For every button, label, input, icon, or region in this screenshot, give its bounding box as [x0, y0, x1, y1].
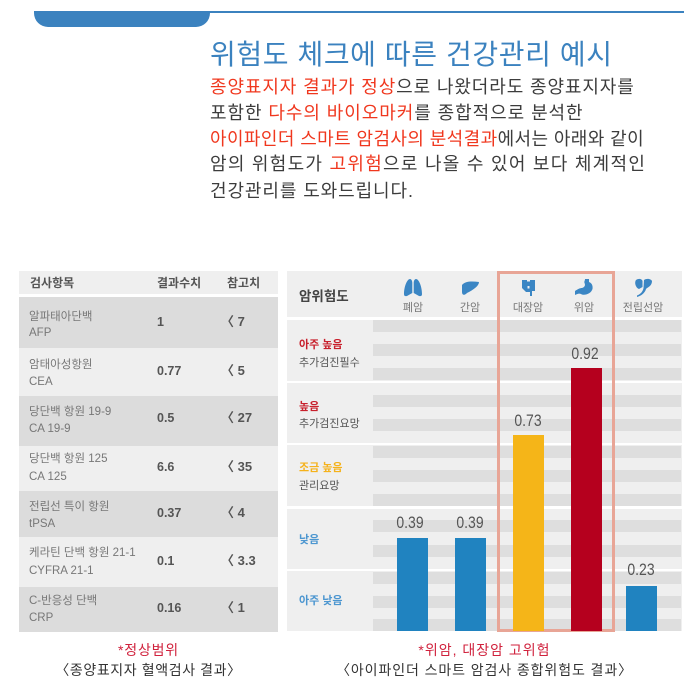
risk band: slightly high: 조금 높음 — [299, 462, 343, 474]
row: CYFRA 21-1 — [19, 537, 278, 587]
intro text block: 암의 위험도가 고위험으로 나올 수 있어 보다 체계적인 — [210, 154, 646, 174]
row: AFP: 알파태아단백 — [29, 311, 92, 323]
risk band: high — [287, 383, 682, 443]
row: CA 19-9: 당단백 항원 19-9 — [29, 406, 111, 418]
risk band: high: 높음 — [299, 401, 319, 413]
row: CRP: 0.16 — [157, 601, 181, 615]
icon: stomach: 위암 — [574, 302, 594, 314]
heading: cancer risk: 암위험도 — [299, 289, 349, 304]
row: CA 125: 당단백 항원 125 — [29, 453, 107, 465]
row: AFP: AFP — [29, 327, 51, 339]
risk band: low — [287, 509, 682, 569]
icon: liver: 간암 — [460, 302, 480, 314]
row: CA 19-9 — [19, 396, 278, 446]
table header: 결과수치 — [157, 276, 201, 290]
intro text block: 포함한 다수의 바이오마커를 종합적으로 분석한 — [210, 103, 584, 123]
row: tPSA: 0.37 — [157, 506, 181, 520]
intro text block: 건강관리를 도와드립니다. — [210, 181, 414, 201]
row: tPSA — [19, 491, 278, 537]
row: CEA: 〈 5 — [221, 363, 245, 378]
table header — [19, 271, 278, 294]
row: CRP — [19, 587, 278, 632]
row: CRP: C-반응성 단백 — [29, 595, 97, 607]
icon: prostate — [623, 278, 663, 314]
row: CYFRA 21-1: 0.1 — [157, 554, 174, 568]
risk band: very high — [287, 320, 682, 381]
intro text block: 종양표지자 결과가 정상으로 나왔더라도 종양표지자를 — [210, 77, 635, 97]
bar: colorectal cancer 0.73 — [513, 410, 544, 631]
icon: lungs: 폐암 — [403, 302, 423, 314]
row: CA 19-9: 〈 27 — [221, 410, 252, 425]
row: AFP — [19, 297, 278, 348]
caption: cancer risk chart: 〈아이파인더 스마트 암검사 종합위험도 결과〉 — [336, 662, 633, 678]
risk band: very high: 추가검진필수 — [299, 357, 360, 369]
bar: stomach cancer 0.92: 0.92 — [571, 343, 599, 363]
bar: colorectal cancer 0.73: 0.73 — [514, 410, 542, 430]
risk band: slightly high — [287, 445, 682, 506]
risk band: very low — [287, 571, 682, 631]
header tab and rule — [34, 11, 684, 27]
panel: cancer risk chart — [287, 271, 682, 632]
icon: lungs — [403, 279, 423, 314]
icon: colon: 대장암 — [513, 302, 543, 314]
row: tPSA: 전립선 특이 항원 — [29, 501, 109, 513]
icon: prostate: 전립선암 — [623, 302, 663, 314]
row: CYFRA 21-1: 〈 3.3 — [221, 553, 256, 568]
row: CA 125 — [19, 446, 278, 491]
title: 위험도 체크에 따른 건강관리 예시 — [210, 39, 613, 70]
risk band: very low: 아주 낮음 — [299, 595, 343, 607]
row: tPSA: tPSA — [29, 518, 55, 530]
row: CEA: 0.77 — [157, 364, 181, 378]
row: AFP: 〈 7 — [221, 314, 245, 329]
row: CYFRA 21-1: CYFRA 21-1 — [29, 565, 94, 577]
risk band: very high: 아주 높음 — [299, 339, 343, 351]
bar: liver cancer 0.39: 0.39 — [456, 512, 484, 532]
intro text block: 아이파인더 스마트 암검사의 분석결과에서는 아래와 같이 — [210, 129, 644, 149]
row: CRP: CRP — [29, 612, 53, 624]
bar: lung cancer 0.39: 0.39 — [396, 512, 424, 532]
icon: colon — [513, 280, 543, 314]
row: tPSA: 〈 4 — [221, 505, 245, 520]
caption: tumor marker table: 〈종양표지자 혈액검사 결과〉 — [55, 662, 242, 678]
table header: 검사항목 — [30, 276, 74, 290]
risk band: slightly high: 관리요망 — [299, 480, 339, 492]
risk band: low: 낮음 — [299, 534, 319, 546]
row: CEA: CEA — [29, 376, 53, 388]
panel: tumor marker table — [19, 271, 278, 632]
risk band: high: 추가검진요망 — [299, 418, 360, 430]
bar: liver cancer 0.39 — [455, 512, 486, 631]
icon: liver — [460, 282, 480, 314]
bar: lung cancer 0.39 — [396, 512, 428, 631]
caption: tumor marker table: *정상범위 — [118, 642, 179, 658]
row: CA 19-9: 0.5 — [157, 411, 174, 425]
background stripes — [373, 320, 681, 631]
row: CA 125: 〈 35 — [221, 459, 252, 474]
row: CEA: 암태아성항원 — [29, 359, 92, 371]
bar: stomach cancer 0.92 — [571, 343, 602, 631]
bar: prostate cancer 0.23 — [626, 559, 657, 631]
icon: stomach — [574, 279, 594, 314]
caption: tumor marker table — [55, 642, 242, 678]
row: AFP: 1 — [157, 315, 164, 329]
highlight box: high-risk cancers — [497, 271, 615, 632]
row: CA 19-9: CA 19-9 — [29, 423, 71, 435]
chart header band — [287, 271, 682, 317]
table header: 참고치 — [227, 276, 260, 290]
row: CA 125: CA 125 — [29, 471, 67, 483]
bar: prostate cancer 0.23: 0.23 — [627, 559, 655, 579]
caption: cancer risk chart: *위암, 대장암 고위험 — [418, 642, 551, 658]
caption: cancer risk chart — [336, 642, 633, 678]
row: CEA — [19, 348, 278, 396]
intro text block — [210, 77, 646, 201]
row: CA 125: 6.6 — [157, 460, 174, 474]
row: CRP: 〈 1 — [221, 600, 245, 615]
row: CYFRA 21-1: 케라틴 단백 항원 21-1 — [29, 547, 136, 559]
